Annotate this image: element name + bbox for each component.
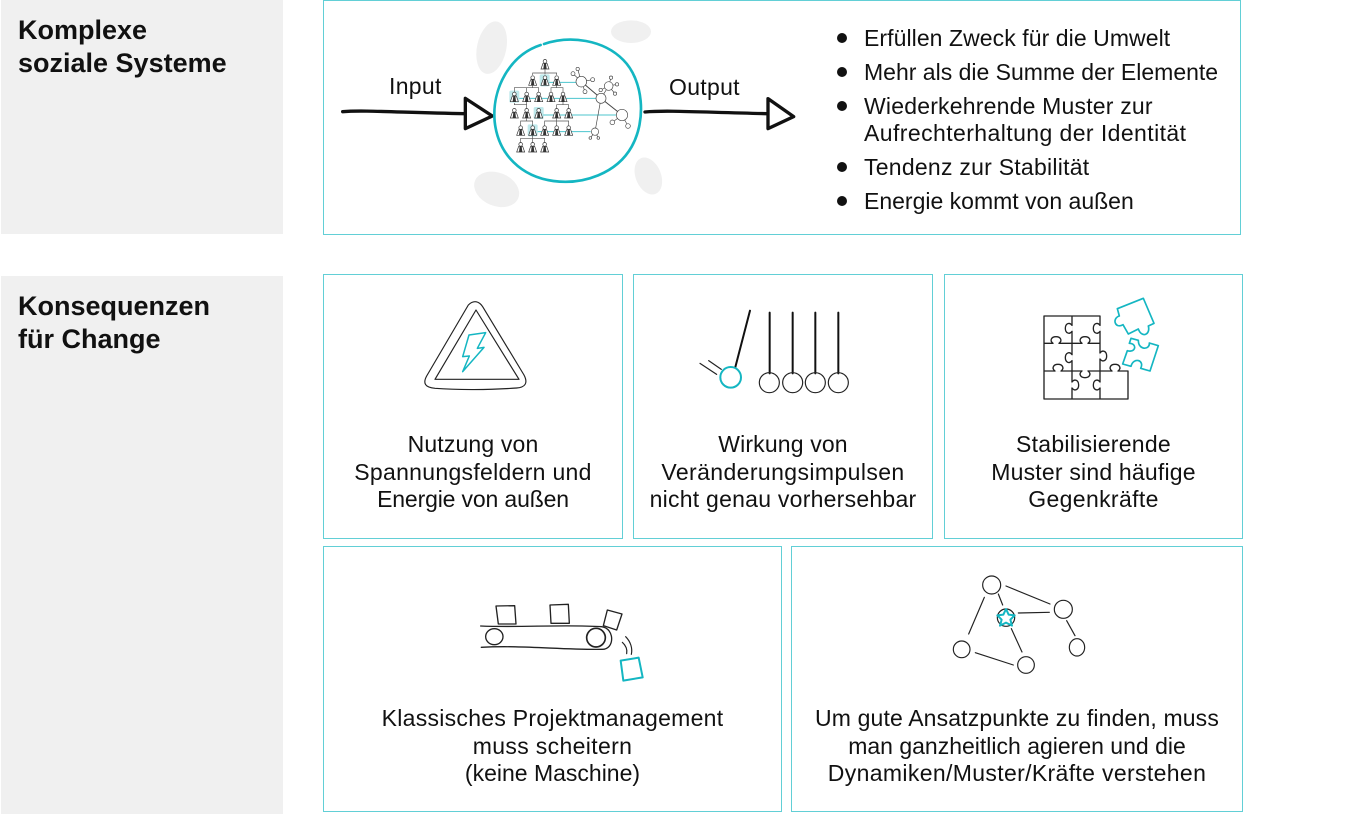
side panel: Konsequenzen für Change: [1, 276, 283, 814]
side panel: Komplexe soziale Systeme: [1, 0, 283, 234]
icon: conveyor belt: [480, 604, 644, 682]
card: Veränderungsimpulse: [633, 274, 933, 539]
icon: pendulum: [699, 310, 849, 394]
list: system properties: Erfüllen Zweck für die Umwelt: [864, 25, 1170, 51]
text: Stabilisierende: [1016, 431, 1171, 457]
diagram: input, system, output: [341, 20, 796, 207]
card: Ansatzpunkte: [791, 546, 1243, 812]
text: [354, 431, 592, 512]
teal links: [519, 82, 616, 132]
text: Wirkung von: [718, 431, 848, 457]
card: Projektmanagement: [323, 546, 782, 812]
heading: Komplexe soziale Systeme: Komplexe: [18, 15, 147, 45]
text: Um gute Ansatzpunkte zu finden, muss: [815, 705, 1219, 731]
text: Muster sind häufige: [991, 459, 1196, 485]
list: system properties: Aufrechterhaltung der Identität: [864, 120, 1186, 146]
output arrow: [645, 99, 794, 129]
teal highlights: [509, 74, 550, 136]
text: man ganzheitlich agieren und die: [848, 733, 1186, 759]
list: system properties: [837, 25, 1218, 214]
label: Input: Input: [389, 73, 442, 99]
text: [815, 705, 1219, 786]
list: system properties: Wiederkehrende Muster zur: [864, 93, 1153, 119]
hierarchy lines: [514, 68, 569, 143]
label: Output: Output: [669, 74, 740, 100]
text: Gegenkräfte: [1028, 486, 1159, 512]
list: system properties: Tendenz zur Stabilität: [864, 154, 1089, 180]
icon: network with star: [952, 575, 1086, 674]
people: [510, 60, 573, 152]
item 5: [837, 188, 1134, 214]
card: Spannungsfelder: [323, 274, 623, 539]
list: system properties: Energie kommt von außen: [864, 188, 1134, 214]
text: [650, 431, 916, 512]
card: Stabilisierende Muster: [944, 274, 1243, 539]
icon: puzzle: [1043, 298, 1160, 400]
text: nicht genau vorhersehbar: [650, 486, 916, 512]
list: system properties: Mehr als die Summe der Elemente: [864, 59, 1218, 85]
heading: Komplexe soziale Systeme: [18, 15, 227, 78]
network: [571, 67, 630, 139]
text: Nutzung von: [408, 431, 538, 457]
text: Veränderungsimpulsen: [661, 459, 905, 485]
org chart and network: [509, 60, 630, 152]
heading: Konsequenzen für Change: Konsequenzen: [18, 291, 210, 321]
text: [991, 431, 1196, 512]
text: muss scheitern: [473, 733, 632, 759]
text: Spannungsfeldern und: [354, 459, 592, 485]
text: Dynamiken/Muster/Kräfte verstehen: [828, 760, 1206, 786]
decorative blobs: [469, 19, 667, 214]
heading: Konsequenzen für Change: für Change: [18, 324, 161, 354]
system circle: [494, 40, 641, 182]
text: (keine Maschine): [465, 760, 640, 786]
text: Klassisches Projektmanagement: [382, 705, 723, 731]
item 2: [837, 59, 1218, 85]
text: Energie von außen: [377, 486, 569, 512]
item 1: [837, 25, 1170, 51]
text: [382, 705, 723, 786]
icon: warning triangle with bolt: [424, 301, 526, 390]
heading: Konsequenzen für Change: [18, 291, 210, 354]
heading: Komplexe soziale Systeme: soziale Systeme: [18, 48, 227, 78]
item 4: [837, 154, 1089, 180]
item 3: [837, 93, 1186, 146]
panel: system diagram and properties: [323, 0, 1241, 235]
input arrow: [343, 98, 492, 129]
